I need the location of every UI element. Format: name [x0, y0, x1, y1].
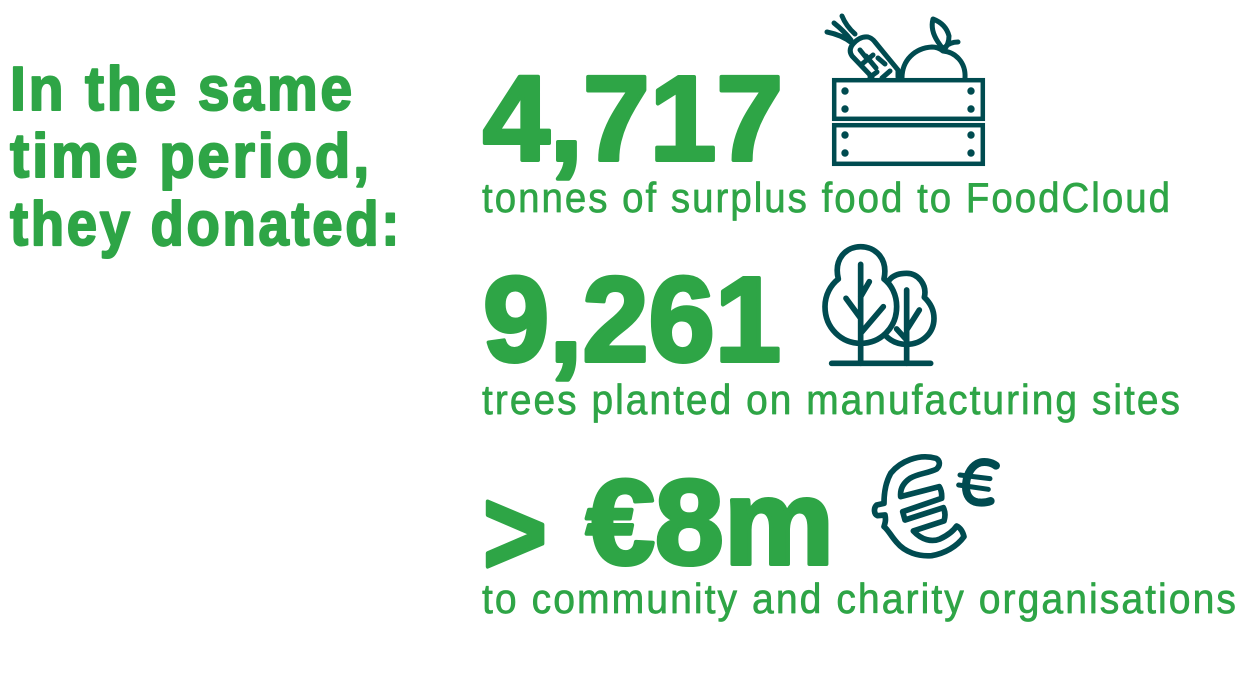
caption: surplus food: tonnes of surplus food to FoodCloud [482, 174, 1172, 221]
caption: trees: trees planted on manufacturing sites [482, 376, 1182, 423]
icon: food crate [827, 16, 983, 164]
heading [10, 55, 402, 259]
icon: trees [825, 247, 934, 363]
heading: time period, [10, 122, 372, 191]
number: more than 8 million euro: > [483, 464, 547, 600]
heading: In the same [10, 55, 355, 124]
icon: euro coins [874, 457, 996, 556]
number: 4,717: 4,717 [483, 50, 783, 186]
number: more than 8 million euro [483, 454, 834, 600]
heading: they donated: [10, 190, 402, 259]
number: 9,261: 9,261 [483, 251, 781, 387]
stat: community donations [482, 454, 1238, 622]
stat: trees planted [482, 247, 1182, 423]
number: more than 8 million euro: €8m [586, 454, 834, 590]
stat: food donated [482, 16, 1172, 221]
